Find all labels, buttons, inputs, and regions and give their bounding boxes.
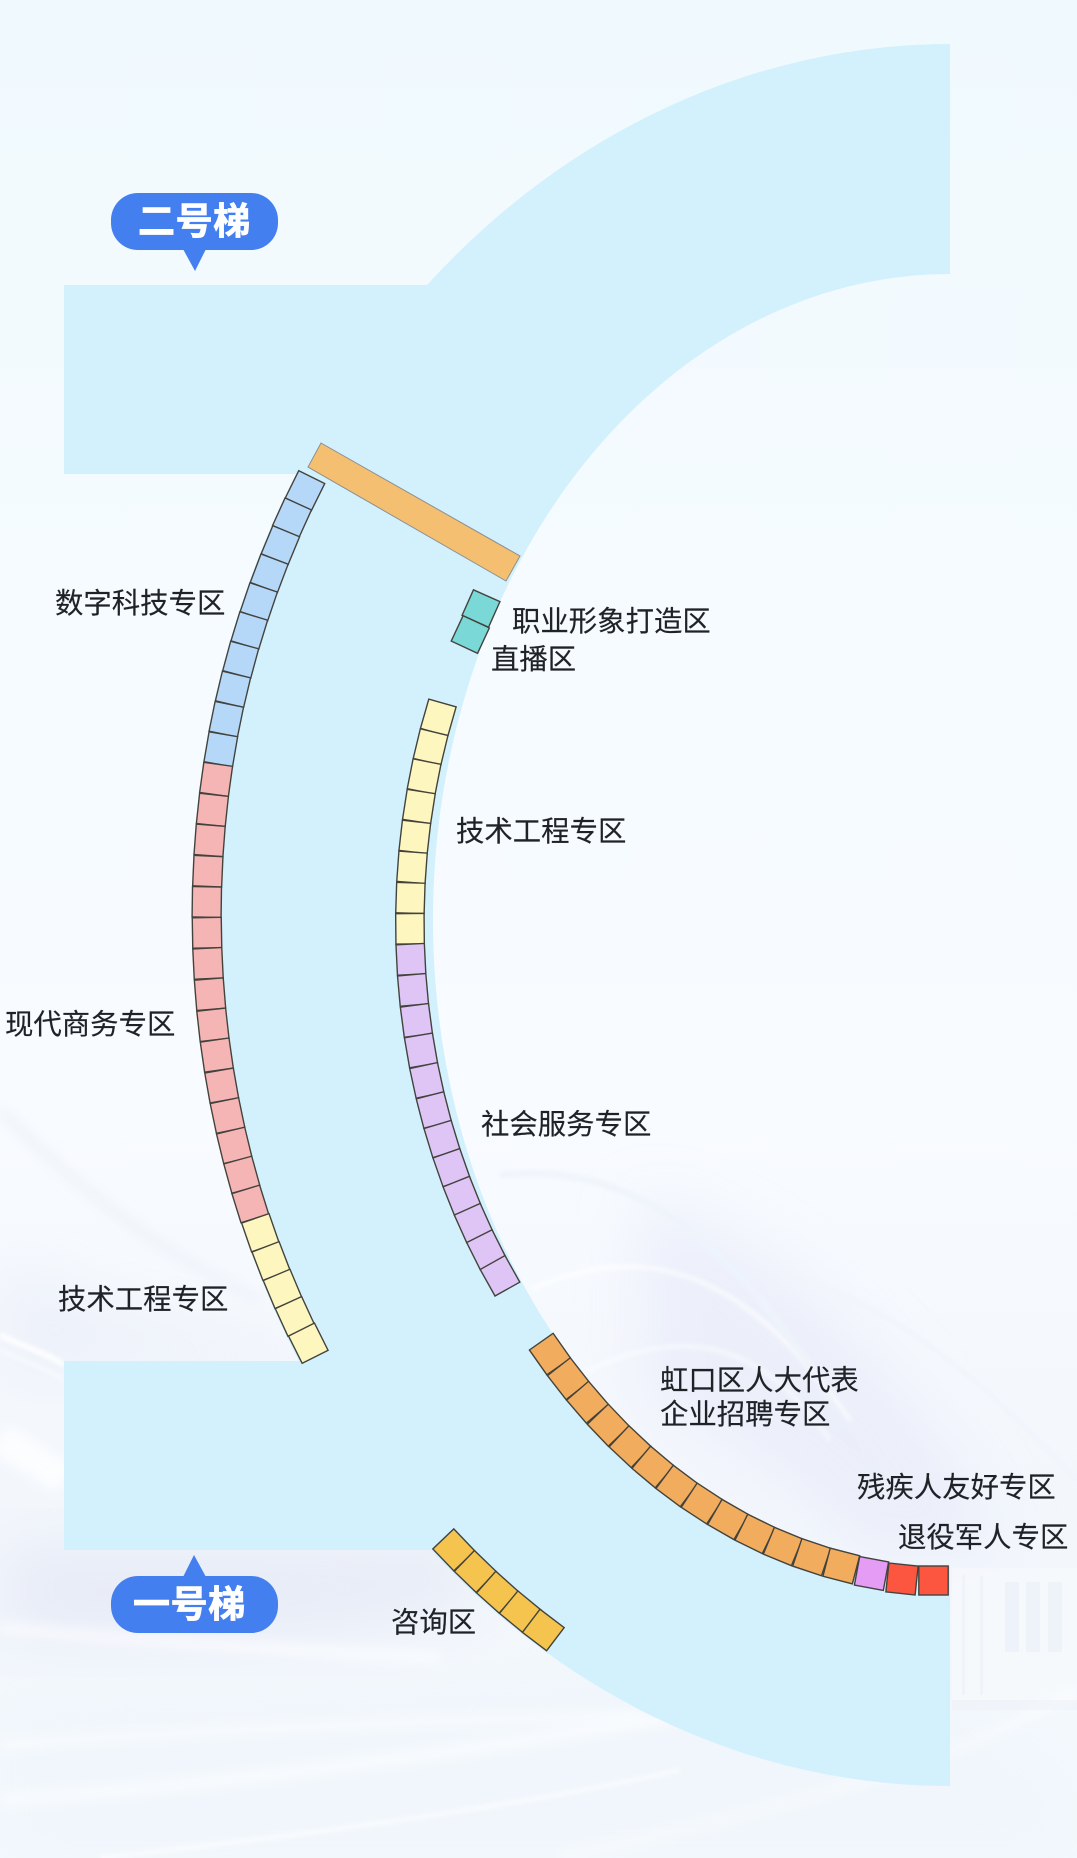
building silhouette xyxy=(952,1568,1077,1710)
booth: disability friendly zone xyxy=(854,1557,889,1590)
label: consultation: 咨询区 xyxy=(391,1607,476,1639)
booths: technical engineering zone right xyxy=(396,699,456,944)
label: veterans: 退役军人专区 xyxy=(898,1522,1068,1554)
label: social services: 社会服务专区 xyxy=(481,1109,651,1141)
label: career image: 职业形象打造区 xyxy=(512,606,711,638)
label: disability friendly: 残疾人友好专区 xyxy=(857,1472,1056,1504)
bar: orange rest area xyxy=(308,443,520,581)
label: technical engineering left: 技术工程专区 xyxy=(58,1284,228,1316)
label: live streaming: 直播区 xyxy=(491,644,576,676)
elevator 2 marker: 二号梯 xyxy=(138,201,251,242)
booths: veterans zone xyxy=(886,1563,948,1595)
label: digital technology: 数字科技专区 xyxy=(55,588,225,620)
booths: digital technology zone xyxy=(204,471,325,767)
label: technical engineering right: 技术工程专区 xyxy=(456,816,626,848)
label: Hongkou deputies recruitment: 虹口区人大代表 xyxy=(660,1365,859,1397)
floor plan corridor xyxy=(64,44,950,1786)
booths: consultation zone xyxy=(433,1529,564,1651)
label: modern business: 现代商务专区 xyxy=(5,1009,175,1041)
booths: technical engineering zone left xyxy=(242,1214,328,1363)
label: Hongkou deputies recruitment: 企业招聘专区 xyxy=(660,1399,830,1431)
elevator 2 marker xyxy=(111,193,278,271)
booths: social services zone xyxy=(396,943,520,1296)
elevator 1 marker: 一号梯 xyxy=(133,1584,246,1625)
elevator 1 marker xyxy=(111,1555,278,1633)
booths: career image and live streaming xyxy=(451,590,500,653)
booths: Hongkou deputies enterprise recruitment zone xyxy=(529,1333,860,1584)
booths: modern business zone xyxy=(192,762,269,1223)
